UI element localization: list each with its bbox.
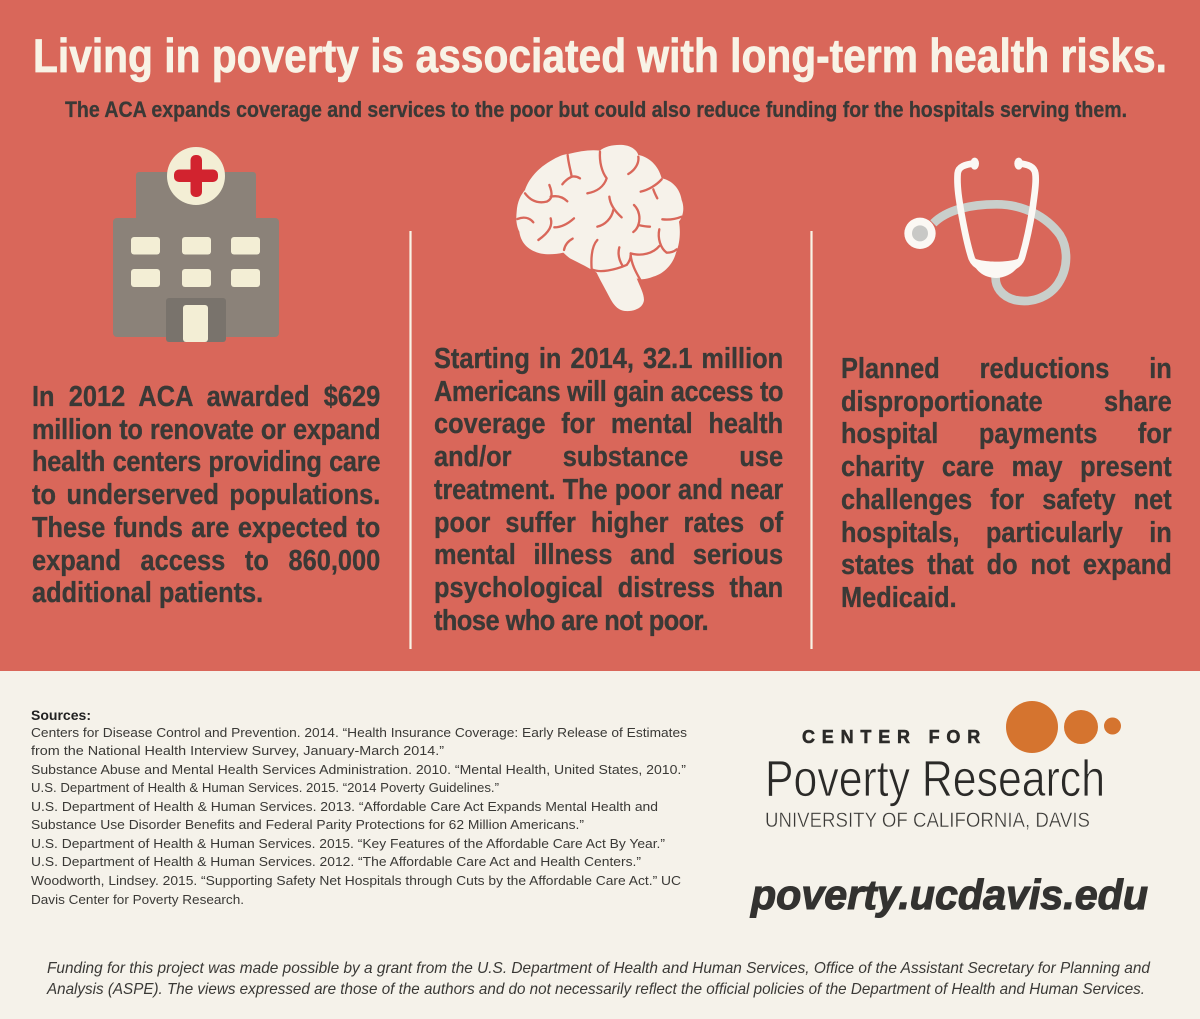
- logo: Center for Poverty Research: Poverty Research: [765, 750, 1105, 807]
- text block: column 3 hospital payments: [841, 353, 1172, 614]
- text block: column 3 hospital payments: hospital payments for: [841, 418, 1172, 450]
- text block: column 3 hospital payments: hospitals, particularly in: [841, 517, 1172, 549]
- footer background panel: [0, 671, 1200, 1019]
- icon: hospital: [113, 147, 279, 342]
- sources: U.S. Department of Health & Human Services. 2012. “The Affordable Care Act and Health Centers.”: [31, 854, 641, 869]
- text block: column 1 health centers: [32, 381, 380, 609]
- sources: U.S. Department of Health & Human Services. 2013. “Affordable Care Act Expands Mental Health and: [31, 799, 658, 814]
- text block: column 2 mental health coverage: those who are not poor.: [434, 605, 708, 637]
- text block: column 2 mental health coverage: Americans will gain access to: [434, 376, 783, 408]
- text block: column 3 hospital payments: disproportionate share: [841, 386, 1172, 418]
- sources: [31, 708, 687, 907]
- sources: Centers for Disease Control and Prevention. 2014. “Health Insurance Coverage: Early Release of Estimates: [31, 725, 687, 740]
- text block: column 2 mental health coverage: Starting in 2014, 32.1 million: [434, 343, 783, 375]
- sources: Woodworth, Lindsey. 2015. “Supporting Safety Net Hospitals through Cuts by the Affordable Care Act.” UC: [31, 873, 681, 888]
- text block: column 3 hospital payments: Planned reductions in: [841, 353, 1172, 385]
- text block: column 3 hospital payments: Medicaid.: [841, 582, 957, 614]
- text block: column 2 mental health coverage: and/or substance use: [434, 441, 783, 473]
- website URL: poverty.ucdavis.edu: [750, 871, 1148, 918]
- text block: column 1 health centers: health centers providing care: [32, 446, 380, 478]
- text block: column 1 health centers: In 2012 ACA awarded $629: [32, 381, 380, 413]
- logo: Center for Poverty Research: [765, 701, 1121, 832]
- text block: column 2 mental health coverage: treatment. The poor and near: [434, 474, 783, 506]
- text block: column 2 mental health coverage: [434, 343, 784, 637]
- funding disclaimer: Analysis (ASPE). The views expressed are those of the authors and do not necessarily reflect the official policies of the Department of Health and Human Services.: [46, 981, 1145, 998]
- sources: from the National Health Interview Survey, January-March 2014.”: [31, 743, 444, 758]
- text block: column 3 hospital payments: states that do not expand: [841, 549, 1172, 581]
- text block: column 2 mental health coverage: poor suffer higher rates of: [434, 507, 783, 539]
- sources: U.S. Department of Health & Human Services. 2015. “Key Features of the Affordable Care Act By Year.”: [31, 836, 665, 851]
- text block: column 2 mental health coverage: coverage for mental health: [434, 408, 783, 440]
- logo: Center for Poverty Research: CENTER FOR: [802, 727, 987, 747]
- text block: column 3 hospital payments: challenges for safety net: [841, 484, 1172, 516]
- icon: brain: [516, 145, 683, 311]
- sources: Sources:: [31, 708, 91, 723]
- text block: column 1 health centers: to underserved populations.: [32, 479, 380, 511]
- sources: Substance Abuse and Mental Health Services Administration. 2010. “Mental Health, United States, 2010.”: [31, 762, 686, 777]
- funding disclaimer: Funding for this project was made possible by a grant from the U.S. Department of Health and Human Services, Office of the Assistant Secretary for Planning and: [47, 960, 1151, 977]
- funding disclaimer: [46, 960, 1151, 998]
- sources: U.S. Department of Health & Human Services. 2015. “2014 Poverty Guidelines.”: [31, 780, 499, 795]
- sources: Substance Use Disorder Benefits and Federal Parity Protections for 62 Million Americans.”: [31, 817, 584, 832]
- text block: column 3 hospital payments: charity care may present: [841, 451, 1172, 483]
- text block: column 2 mental health coverage: mental illness and serious: [434, 539, 783, 571]
- text block: column 1 health centers: million to renovate or expand: [32, 414, 380, 446]
- sources: Davis Center for Poverty Research.: [31, 892, 244, 907]
- text block: column 1 health centers: additional patients.: [32, 577, 263, 609]
- text block: column 2 mental health coverage: psychological distress than: [434, 572, 783, 604]
- icon: stethoscope: [904, 158, 1066, 301]
- text block: column 1 health centers: These funds are expected to: [32, 512, 380, 544]
- text block: column 1 health centers: expand access to 860,000: [32, 545, 380, 577]
- logo: Center for Poverty Research: UNIVERSITY OF CALIFORNIA, DAVIS: [765, 809, 1090, 832]
